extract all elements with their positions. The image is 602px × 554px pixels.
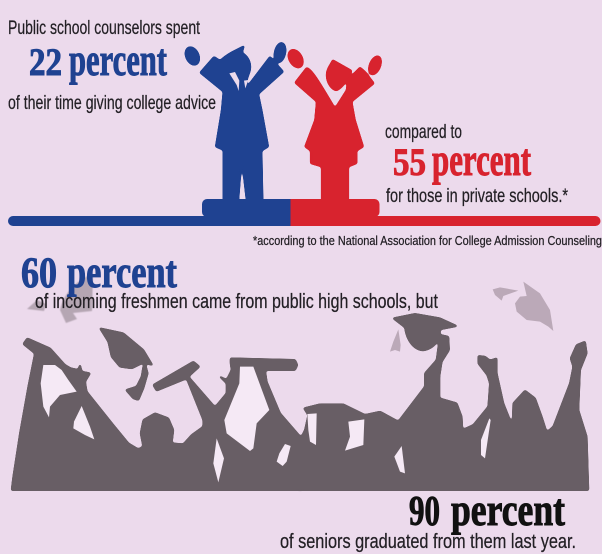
faint tossed cap and tassel bbox=[390, 282, 553, 352]
faint tossed cap behind heading bbox=[27, 274, 93, 323]
text: ninety percent bbox=[280, 484, 576, 553]
text: ninety percent: 90 bbox=[409, 489, 440, 535]
text: public school counselors bbox=[8, 17, 216, 114]
base platform bbox=[202, 199, 380, 217]
icon: red graduate figure bbox=[285, 47, 384, 202]
text: public school counselors: 22 bbox=[29, 41, 62, 84]
text: private school comparison bbox=[385, 121, 568, 207]
text: private school comparison: percent bbox=[432, 135, 531, 185]
text: public school counselors: percent bbox=[69, 35, 167, 85]
text: private school comparison: compared to bbox=[385, 121, 462, 143]
text: sixty percent: of incoming freshmen came from public high schools, but bbox=[35, 290, 438, 313]
text: sixty percent bbox=[21, 246, 438, 313]
crowd light gown highlights right bbox=[307, 413, 491, 473]
crowd light gown highlights left bbox=[41, 365, 291, 482]
divider bar bbox=[8, 216, 600, 226]
text: public school counselors: Public school counselors spent bbox=[8, 17, 200, 39]
text: sixty percent: 60 bbox=[21, 250, 57, 297]
graduates silhouette crowd bbox=[12, 282, 588, 490]
text: private school comparison: 55 bbox=[393, 141, 426, 184]
text: sixty percent: percent bbox=[67, 246, 178, 297]
icon: blue graduate figure bbox=[183, 42, 287, 202]
text: public school counselors: of their time giving college advice bbox=[8, 92, 216, 114]
text: ninety percent: percent bbox=[451, 484, 566, 535]
crowd dark silhouette bbox=[12, 314, 588, 490]
